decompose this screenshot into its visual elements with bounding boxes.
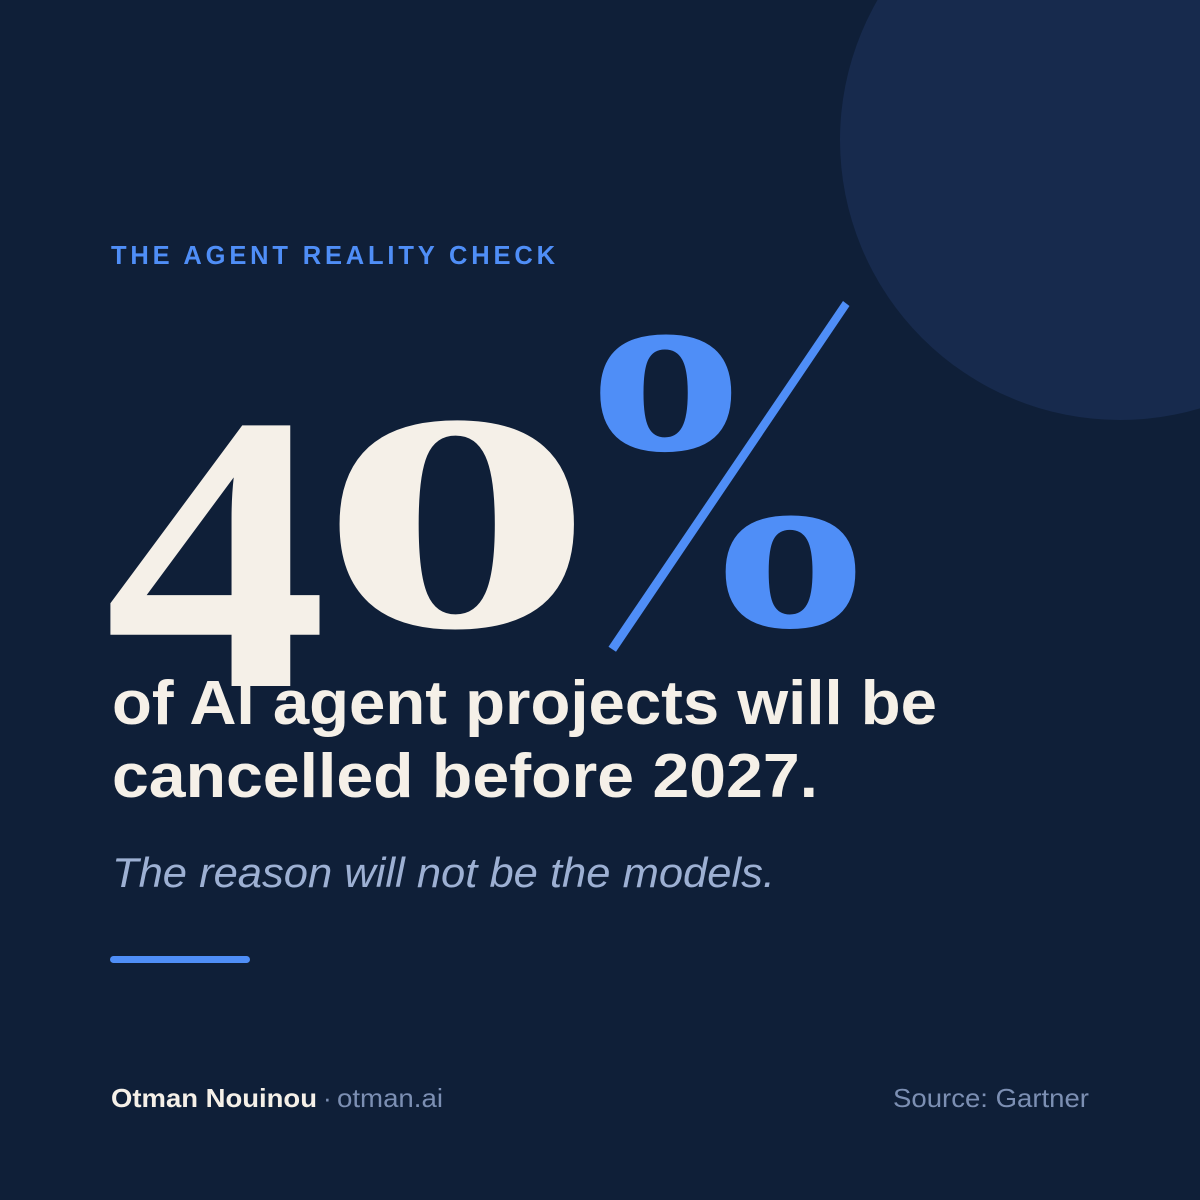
headline: cancelled before 2027.: [112, 742, 818, 811]
eyebrow heading: THE AGENT REALITY CHECK: [111, 242, 556, 270]
author credit: ·: [323, 1083, 332, 1113]
decorative circle: [840, 0, 1200, 420]
big statistic: 40%: 4: [104, 334, 328, 772]
accent rule: [110, 956, 250, 963]
big statistic: 40%: %: [558, 262, 970, 622]
big statistic: 40%: %: [486, 345, 894, 693]
italic tagline: The reason will not be the models.: [112, 849, 775, 896]
headline: of AI agent projects will be: [112, 669, 937, 738]
author credit: Otman Nouinou: [111, 1083, 317, 1113]
author credit: otman.ai: [337, 1083, 443, 1113]
big statistic: 40%: 0: [318, 351, 595, 694]
author credit: [111, 1083, 443, 1113]
big statistic: 40%: [110, 301, 856, 686]
source note: Source: Gartner: [893, 1083, 1089, 1113]
headline: [112, 669, 937, 811]
